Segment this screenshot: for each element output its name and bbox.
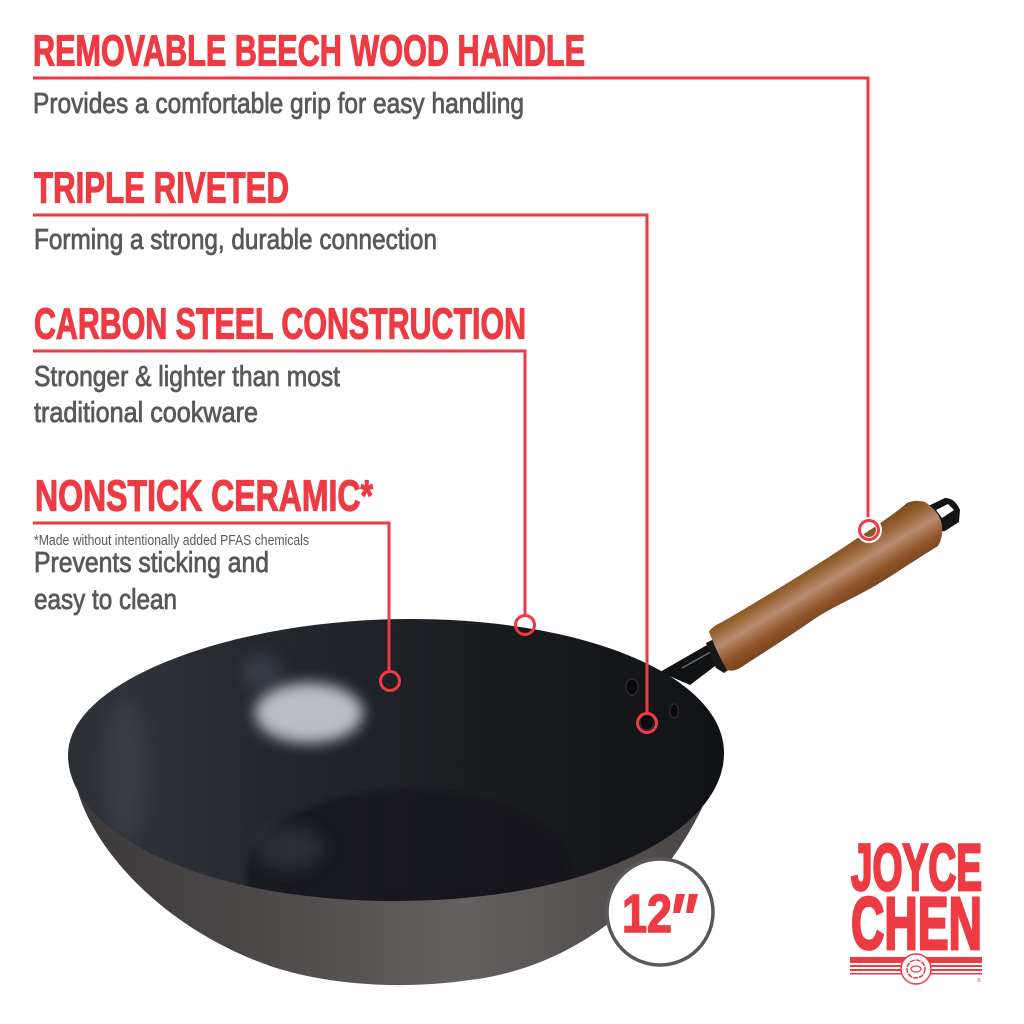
logo emblem	[901, 954, 931, 984]
leader line	[33, 351, 525, 615]
brand logo	[850, 830, 982, 984]
size badge	[607, 859, 713, 965]
marker	[638, 714, 656, 732]
pan interior	[68, 619, 724, 901]
handle wood	[709, 501, 942, 671]
handle collar	[706, 638, 736, 673]
description: Forming a strong, durable connection	[34, 224, 437, 256]
pan outer body	[76, 760, 716, 985]
callout: triple riveted	[33, 164, 656, 732]
wok pan	[60, 610, 740, 985]
heading: REMOVABLE BEECH WOOD HANDLE	[33, 26, 585, 76]
marker	[516, 616, 534, 634]
leader line	[33, 215, 647, 713]
heading: TRIPLE RIVETED	[34, 164, 289, 212]
callout: nonstick ceramic	[33, 472, 400, 690]
callout: nonstick ceramic: easy to clean	[34, 584, 177, 616]
logo stripes	[850, 957, 982, 974]
callout: removable beech wood handle	[33, 26, 879, 540]
description: Prevents sticking and	[34, 547, 269, 579]
size badge: 12	[622, 884, 672, 944]
marker	[380, 672, 400, 690]
description: Stronger & lighter than most	[34, 361, 340, 393]
heading: CARBON STEEL CONSTRUCTION	[34, 300, 526, 348]
footnote: *Made without intentionally added PFAS chemicals	[34, 533, 309, 549]
callout: carbon steel construction	[33, 300, 534, 634]
callout: carbon steel construction: traditional cookware	[34, 397, 258, 429]
pan handle shaft	[660, 645, 723, 685]
rivets	[626, 679, 678, 730]
heading: NONSTICK CERAMIC*	[35, 472, 374, 520]
wooden handle	[706, 498, 960, 673]
marker	[859, 520, 879, 540]
description: Provides a comfortable grip for easy handling	[33, 88, 524, 120]
leader line	[33, 78, 868, 522]
brand logo: ®	[977, 977, 981, 984]
leader line	[33, 523, 389, 671]
handle end loop	[924, 498, 960, 532]
